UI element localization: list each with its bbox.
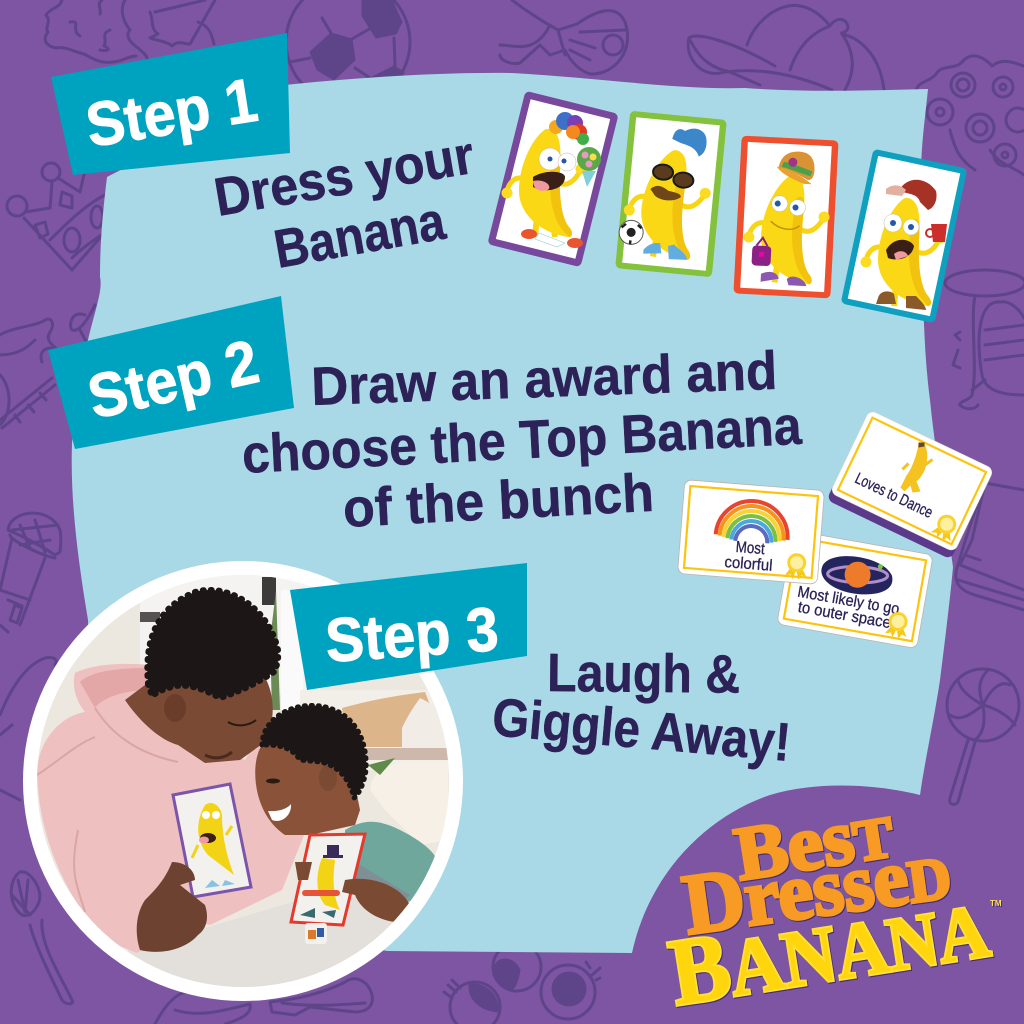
banana outfit cards [474,87,977,325]
doodle: shoes [155,979,372,1024]
card: flower hat banana, orange [733,136,839,298]
trademark: TM [990,899,1002,908]
logo: Best Dressed Banana [663,786,1002,1024]
step 3 instruction: Laugh & [547,643,740,705]
card: sunglasses banana, green [615,111,727,277]
doodle: microphone [0,513,61,632]
doodle: racket [0,657,56,800]
step 3 instruction: Giggle Away! [490,687,793,773]
doodle: roller skate [0,305,95,428]
step 1 tag [51,33,290,175]
award card: loves to dance: Loves to Dance [852,470,935,522]
photo: die [305,923,327,944]
doodle: hat with flowers [45,0,215,62]
doodle: lollipop [947,669,1019,804]
photo: red banana card [291,834,365,925]
photo: man's hoodie [37,664,304,953]
doodle: open book [956,483,1024,610]
award card: most colorful: colorful [724,554,773,575]
photo: man's face and neck [125,670,273,763]
step 2 instruction: choose the Top Banana [240,396,804,485]
step 2 instruction: Draw an award and [310,341,778,417]
doodle: baseball cap [688,5,884,90]
step 3 instruction [490,643,793,773]
award cards [678,410,994,649]
award card: most likely to go to outer space: Most likely to go [796,584,901,618]
doodle: whisk [11,872,73,1004]
step 2 tag: Step 2 [82,327,265,433]
doodle: crown [7,163,105,270]
photo: boy's shirt [345,822,436,905]
award card: most likely to go to outer space: to outer space [797,599,892,632]
award card: most colorful [678,480,824,584]
photo: boy's face [255,740,360,835]
doodle: googly eyes [444,943,600,1024]
photo: table [128,896,410,987]
step 3 tag: Step 3 [323,595,501,676]
logo word: Banana: BANANA [663,871,995,1024]
step 3 tag [290,563,527,690]
blue play area panel [72,73,953,953]
doodle: soccer ball [286,0,410,104]
doodle: trumpet [945,270,1024,409]
logo word: Dressed: DresseD [677,820,956,953]
card: trapper hat banana, blue [838,148,977,325]
photo: father and son holding banana cards [23,561,463,1001]
step 2 instruction [240,341,804,539]
card: clown wig banana, purple [474,87,633,271]
award card: loves to dance [826,410,994,560]
photo: purple banana card [173,784,251,897]
step 2 tag [48,296,294,449]
photo: boy's hands [342,879,410,922]
step 1 instruction: Banana [270,191,450,280]
doodle: flower bunch [916,56,1024,175]
doodle: bow tie [500,0,628,74]
photo: man's hand [137,862,207,952]
logo word: Best: BesT [729,786,899,897]
step 1 instruction [210,125,478,280]
photo: man's hair [147,590,278,698]
step 2 instruction: of the bunch [341,463,655,539]
award card: most likely to go to outer space [777,530,933,649]
photo: boy's hair [262,705,366,798]
step 1 tag: Step 1 [81,66,262,161]
photo: window and column backdrop [140,575,320,695]
step 1 instruction: Dress your [210,125,478,228]
award card: most colorful: Most [735,539,766,558]
